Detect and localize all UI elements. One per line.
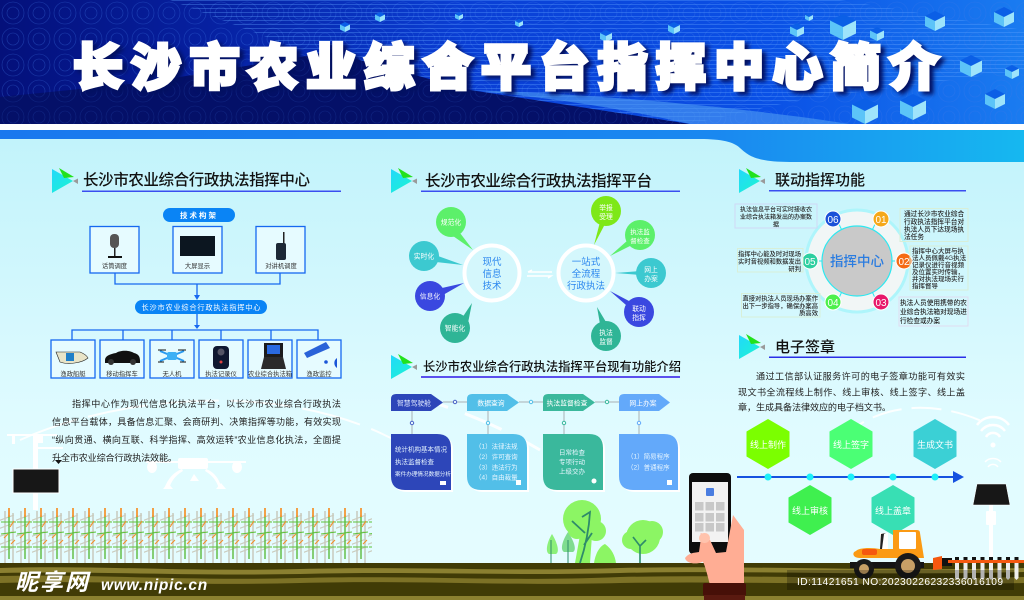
heading: e-signature	[739, 334, 966, 359]
header banner	[0, 0, 1024, 124]
bubble: report handling: 受理	[599, 212, 613, 221]
card: data query: （1）法律法规	[475, 442, 518, 450]
pill: command centre	[135, 300, 267, 314]
note 01	[900, 208, 968, 242]
note 02: 指挥督导	[912, 281, 938, 290]
hub: modern information technology: 信息	[482, 268, 502, 280]
hexagon: online production	[746, 419, 790, 469]
panel: enforcement platform	[391, 168, 680, 351]
paragraph: command centre: 指挥中心作为现代信息化执法平台，以长沙市农业综合行政执法	[72, 398, 341, 409]
illustration: drone left	[146, 458, 246, 489]
panel: existing functions	[391, 354, 681, 492]
paragraph: e-signature: 通过工信部认证服务许可的电子签章功能可有效实	[756, 370, 965, 382]
watermark: nipic: www.nipic.cn	[101, 577, 208, 594]
note 03: 执法人员使用携带的农	[900, 298, 967, 307]
bubble: online case: 网上	[644, 265, 658, 274]
bubble: standardisation	[436, 207, 473, 250]
note 02	[910, 246, 968, 290]
box: mobile command car	[100, 340, 144, 378]
note 06: 业综合执法箱发出的办案数	[740, 213, 812, 221]
box: drone: 无人机	[163, 369, 182, 378]
note 01: 执法人员下达现场执	[904, 224, 964, 234]
arrowheads	[194, 295, 200, 329]
card: online case: （1）简易程序	[627, 452, 670, 460]
step: supervision: 执法监督检查	[547, 398, 588, 408]
hexagon: online seal: 线上盖章	[875, 505, 911, 516]
note 02: 法人员佩戴4G执法	[912, 253, 967, 262]
timeline	[737, 471, 964, 483]
paragraph: e-signature: 章，生成具备法律效应的电子档文书。	[738, 402, 891, 412]
hub: modern information technology	[464, 246, 520, 300]
card: cockpit: 执法监督检查	[395, 457, 434, 466]
hub: one-stop enforcement	[558, 246, 614, 300]
heading: enforcement platform: 长沙市农业综合行政执法指挥平台	[425, 171, 652, 190]
box: mobile command car: 移动指挥车	[106, 369, 138, 378]
hexagon: generate document	[914, 419, 956, 469]
bubble: intelligence: 智能化	[445, 324, 465, 332]
card: cockpit: 案件办理情况数据分析	[395, 470, 451, 478]
box: law recorder	[199, 340, 243, 378]
illustration: corn field	[0, 507, 372, 563]
radial diagram	[802, 210, 912, 312]
bubble: enforcement supervision	[591, 307, 621, 351]
box: law recorder: 执法记录仪	[205, 369, 237, 378]
node 05: 05	[804, 257, 816, 268]
bubble: intelligence	[440, 303, 472, 343]
box: drone	[150, 340, 194, 378]
card: supervision: 日常检查	[559, 448, 586, 456]
box: microphone dispatch: 话筒调度	[102, 261, 128, 270]
note 05: 实时音视频和数据发出	[738, 256, 801, 266]
watermark: id: ID:11421651 NO:20230226232336016109	[797, 577, 1003, 588]
card: data query: （4）自由裁量	[475, 472, 518, 482]
bubble: report handling: 举报	[599, 203, 613, 212]
illustration: ground	[0, 563, 1024, 600]
panel: command centre	[51, 168, 341, 463]
heading: command centre	[52, 168, 341, 193]
paragraph: command centre: “纵向贯通、横向互联、科学指挥、高效运转”农业信息化执法，全面提	[52, 434, 341, 445]
paragraph: command centre	[52, 398, 341, 463]
box: large screen	[173, 226, 222, 273]
note 04: 直接对执法人员现场办案作	[742, 294, 819, 302]
bubble: enforcement supervision: 执法	[599, 328, 613, 337]
decorative white signal arcs and drone	[20, 395, 990, 455]
note 03	[899, 297, 968, 326]
panel: linked command	[735, 168, 968, 326]
hub: modern information technology: 技术	[482, 280, 502, 292]
node 02: 02	[898, 257, 910, 268]
bubble: standardisation: 规范化	[441, 218, 461, 226]
card: data query: （3）违法行为	[475, 462, 518, 472]
heading: existing functions	[391, 354, 681, 379]
step: supervision	[543, 394, 595, 411]
hub: one-stop enforcement: 全流程	[572, 268, 601, 280]
hexagon: online signature	[830, 419, 872, 469]
note 04: 质高效	[799, 308, 819, 317]
box: fishery monitoring: 渔政监控	[306, 369, 332, 378]
box: boat	[51, 340, 95, 378]
double arrow	[527, 270, 552, 278]
node 04: 04	[827, 298, 839, 309]
bubble: informatisation	[415, 281, 464, 311]
hexagon: online review	[788, 485, 832, 535]
note 01: 通过长沙市农业综合	[904, 209, 964, 218]
box: walkie talkie	[256, 226, 305, 273]
step: smart cockpit: 智慧驾驶舱	[397, 398, 431, 408]
paragraph: e-signature: 现文书全流程线上制作、线上审核、线上签字、线上盖	[738, 386, 965, 398]
bubble: online case: 办案	[644, 274, 658, 283]
card: online case: （2）普通程序	[627, 462, 670, 472]
pill: tech architecture: 技术构架	[180, 210, 218, 220]
card: cockpit: 统计机构基本情况	[395, 444, 448, 454]
note 04: 出下一步指导，确保办案高	[742, 301, 818, 310]
bubble: report handling	[591, 196, 621, 245]
pill: tech architecture	[163, 208, 235, 222]
note 03: 行检查或办案	[900, 316, 940, 325]
flow connectors	[412, 402, 639, 434]
card: supervision: 专项行动	[559, 457, 586, 466]
note 01: 法任务	[904, 232, 924, 241]
heading: enforcement platform	[391, 168, 680, 193]
card: supervision	[543, 434, 605, 492]
illustration: hand holding phone	[685, 473, 746, 600]
paragraph: e-signature	[738, 370, 965, 412]
card: data query: （2）许可查询	[475, 452, 518, 461]
note 06	[735, 204, 817, 228]
blue divider band	[0, 124, 1024, 162]
note 02: 记录仪进行音视频	[912, 260, 964, 269]
illustration: weather station left	[7, 434, 63, 510]
note 06: 据	[773, 220, 779, 228]
step: online case	[619, 394, 670, 411]
step: smart cockpit	[391, 394, 443, 411]
pill: command centre: 长沙市农业综合行政执法指挥中心	[142, 303, 260, 312]
step: data query	[467, 394, 519, 411]
note 05: 指挥中心能及时对现场	[738, 249, 801, 258]
note 02: 指挥中心大屏与执	[912, 246, 964, 255]
bubble: enforcement supervision: 监督	[599, 337, 613, 346]
hexagon: generate document: 生成文书	[917, 439, 953, 450]
bubble: linked command: 联动	[632, 304, 646, 313]
bubble: linked command	[610, 291, 654, 327]
note 02: 并对执法现场实行	[912, 274, 964, 283]
illustration: tractor	[850, 530, 1024, 580]
note 03: 业综合执法箱对现场进	[900, 307, 967, 316]
step: online case: 网上办案	[629, 398, 657, 408]
bubble: supervision inspection: 督检查	[630, 236, 650, 245]
note 04	[742, 294, 820, 317]
panel: e-signature	[737, 334, 966, 535]
heading: command centre: 长沙市农业综合行政执法指挥中心	[83, 170, 310, 189]
bubble: supervision inspection: 执法监	[630, 227, 650, 236]
architecture diagram	[51, 208, 341, 378]
watermark: id	[787, 570, 1014, 590]
bubble: real-time: 实时化	[414, 252, 434, 260]
heading: e-signature: 电子签章	[775, 338, 835, 356]
bubble: informatisation: 信息化	[420, 292, 440, 300]
title: 长沙市农业综合平台指挥中心简介	[73, 40, 939, 96]
page background	[0, 139, 1024, 600]
heading: linked command: 联动指挥功能	[775, 172, 865, 189]
bubble: real-time	[409, 241, 463, 271]
note 05: 研判	[788, 264, 801, 273]
box: microphone dispatch	[90, 226, 139, 273]
radial diagram: 指挥中心	[830, 254, 884, 269]
box: enforcement case: 农业综合执法箱	[248, 369, 292, 378]
bubble: linked command: 指挥	[632, 313, 646, 322]
note 06: 执法信息平台可实时接收农	[740, 206, 812, 214]
bubble: supervision inspection	[610, 220, 655, 256]
card: supervision: 上级交办	[559, 466, 586, 476]
hub: one-stop enforcement: 行政执法	[567, 280, 605, 292]
node 06: 06	[827, 215, 839, 226]
hub: modern information technology: 现代	[482, 257, 502, 268]
hexagon: online signature: 线上签字	[833, 439, 869, 450]
bubble: online case	[615, 258, 666, 288]
watermark: nipic	[15, 569, 208, 595]
node 03: 03	[875, 298, 887, 309]
paragraph: command centre: 升全市农业综合行政执法效能。	[52, 452, 177, 463]
box: enforcement case	[248, 340, 292, 378]
node 01: 01	[875, 215, 887, 226]
box: walkie talkie: 对讲机调度	[265, 261, 297, 270]
note 05	[738, 248, 803, 273]
illustration: trees	[547, 500, 663, 563]
card: data query	[467, 434, 529, 492]
card: online case	[619, 434, 680, 492]
box: large screen: 大屏显示	[185, 261, 210, 270]
hexagon: online production: 线上制作	[750, 439, 786, 450]
heading: linked command	[739, 168, 966, 193]
paragraph: command centre: 信息平台载体，具备信息汇聚、会商研判、决策指挥等功能，有效实现	[52, 416, 341, 427]
hub: one-stop enforcement: 一站式	[572, 256, 601, 268]
flow nodes	[410, 400, 641, 425]
heading: existing functions: 长沙市农业综合行政执法指挥平台现有功能介绍	[423, 359, 681, 374]
note 01: 行政执法指挥平台对	[904, 217, 964, 226]
box: boat: 渔政船艇	[60, 369, 86, 378]
hexagon: online review: 线上审核	[792, 505, 828, 516]
note 02: 及位置实时传输，	[912, 267, 964, 276]
step: data query: 数据查询	[477, 398, 505, 408]
watermark: nipic: 昵享网	[15, 569, 91, 595]
hexagon: online seal	[872, 485, 914, 535]
box: fishery monitoring	[297, 340, 341, 378]
card: cockpit	[391, 434, 453, 492]
connector lines	[72, 273, 318, 340]
illustration: wifi and station right	[973, 417, 1010, 565]
